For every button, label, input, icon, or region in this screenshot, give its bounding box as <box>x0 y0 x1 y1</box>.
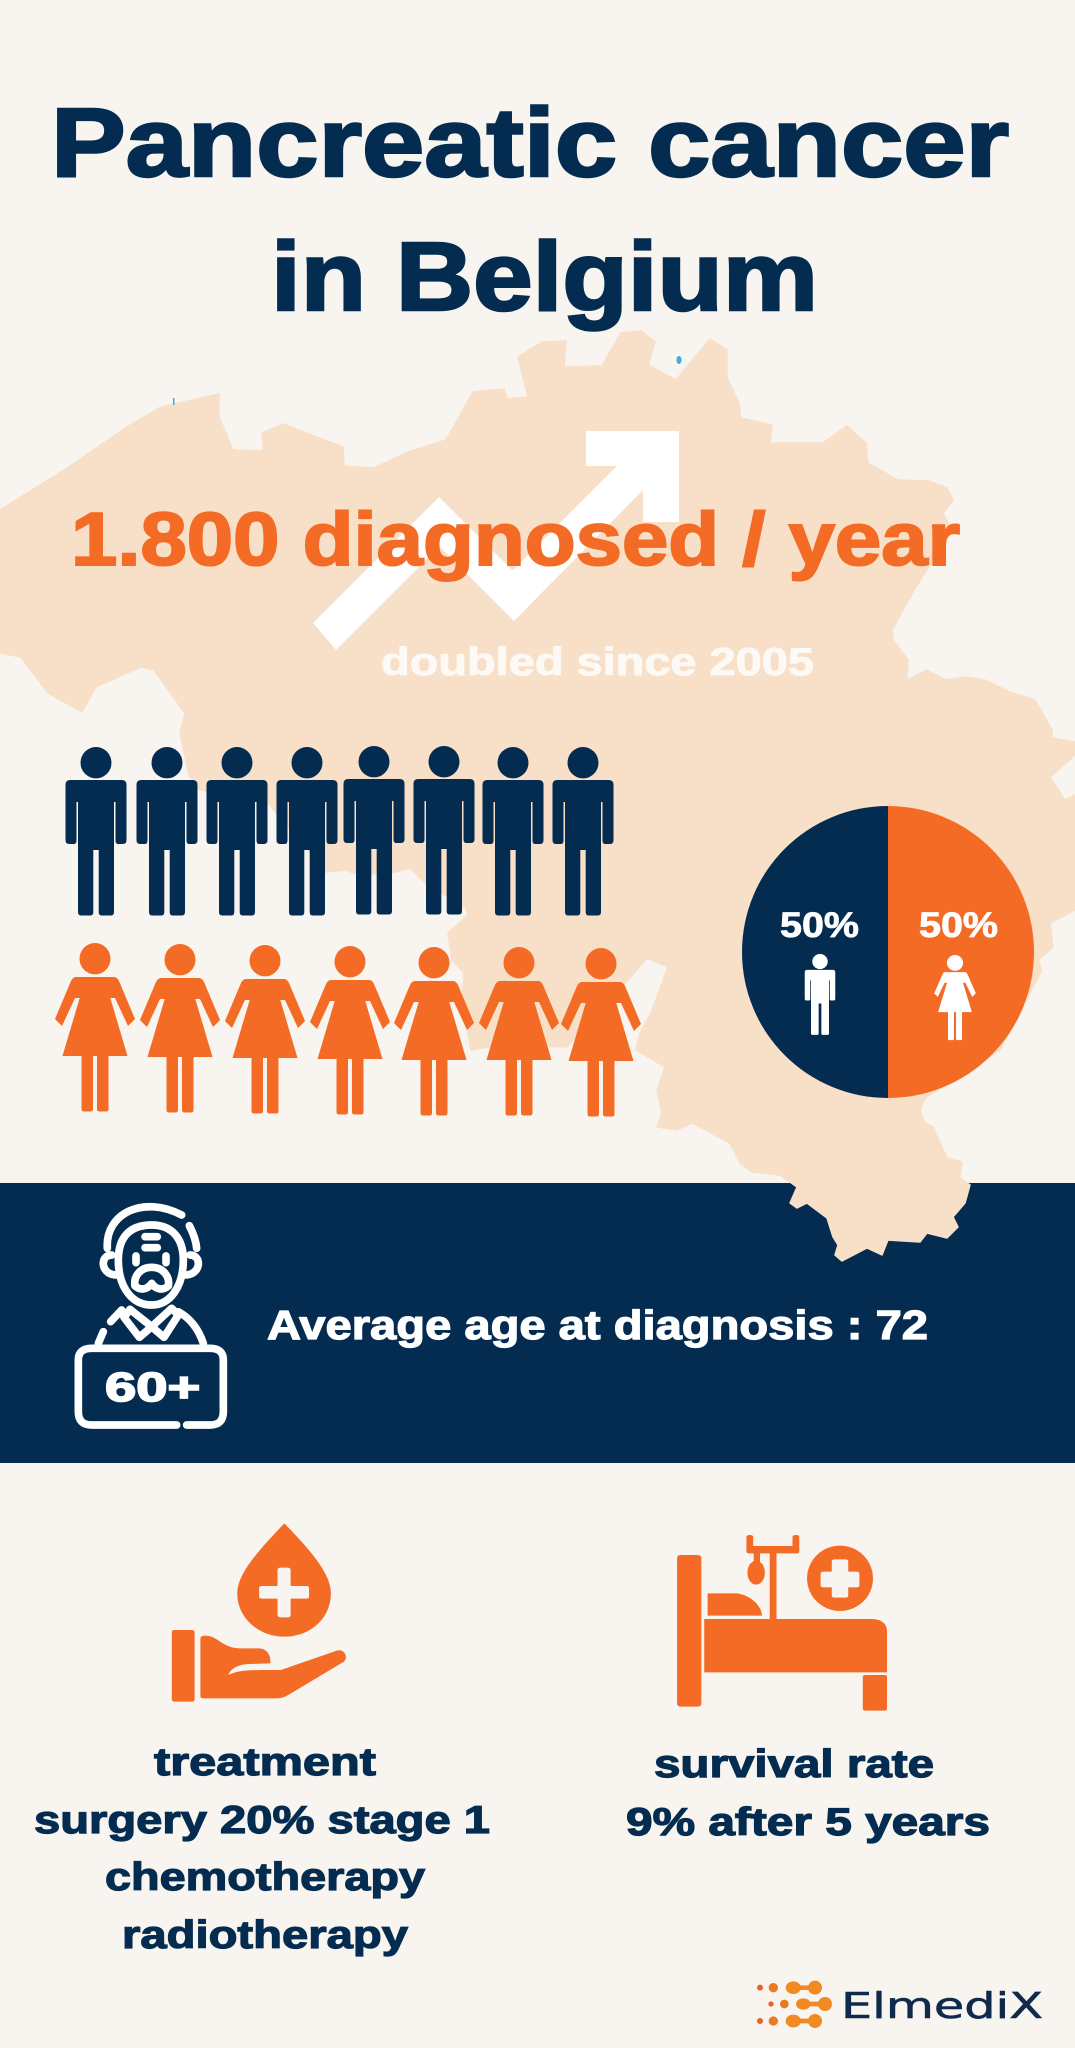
pie chart: gender split: 50% <box>780 906 859 945</box>
average age text: Average age at diagnosis : 72 <box>267 1302 928 1348</box>
map lake marks <box>173 356 682 405</box>
title: Pancreatic cancer <box>51 88 1009 197</box>
row of women icons <box>55 943 641 1116</box>
icon: elderly person 60+: 60+ <box>105 1364 200 1410</box>
treatment text <box>34 1741 490 1957</box>
pie chart: gender split <box>742 806 1034 1098</box>
row of men icons <box>66 746 614 916</box>
growth arrow <box>313 431 679 650</box>
title <box>51 88 1009 331</box>
treatment text: chemotherapy <box>105 1856 425 1899</box>
map of Belgium <box>0 331 1075 1261</box>
headline: diagnoses per year: 1.800 diagnosed / year <box>71 497 960 581</box>
survival rate text: 9% after 5 years <box>626 1801 990 1844</box>
icon: hospital bed <box>677 1535 887 1711</box>
treatment text: radiotherapy <box>122 1914 408 1957</box>
survival rate text: survival rate <box>654 1743 934 1786</box>
icon: hand holding blood drop <box>172 1523 346 1702</box>
logo: Elmedix <box>757 1981 1043 2028</box>
treatment text: surgery 20% stage 1 <box>34 1799 490 1842</box>
age band panel <box>0 1183 1075 1463</box>
subheading: doubled since 2005: doubled since 2005 <box>381 641 814 684</box>
title: in Belgium <box>271 222 818 331</box>
treatment text: treatment <box>154 1741 376 1784</box>
logo: Elmedix: ElmediX <box>841 1986 1043 2027</box>
icon: elderly person 60+ <box>78 1207 223 1425</box>
survival rate text <box>626 1743 990 1844</box>
pie chart: gender split: 50% <box>919 906 998 945</box>
